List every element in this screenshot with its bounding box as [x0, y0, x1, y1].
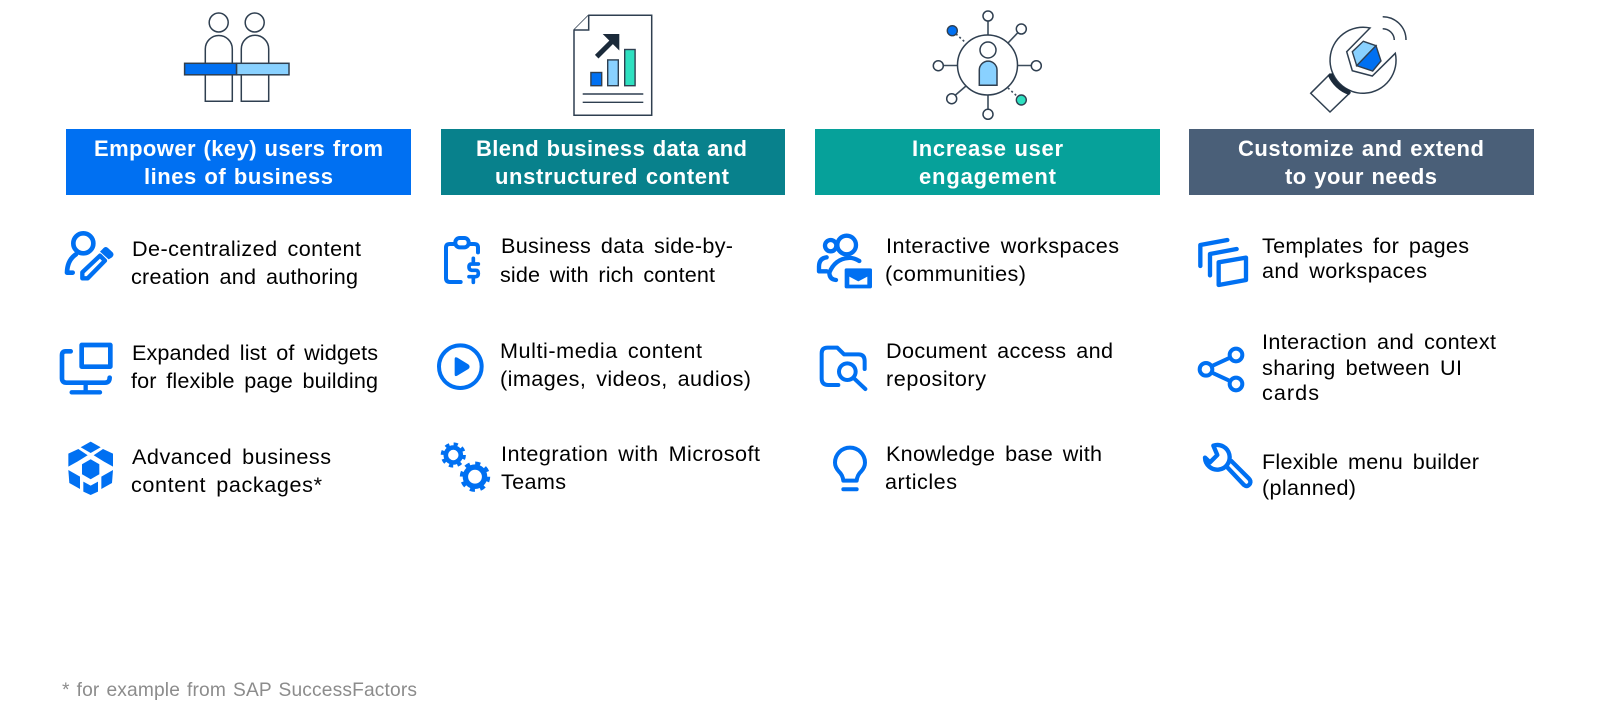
- panel: empower users header: [66, 129, 411, 195]
- panel: user engagement header: Increase user: [912, 136, 1063, 161]
- icon: stacked templates: [1200, 240, 1246, 285]
- icon: wrench with hex nut and signal: [1311, 17, 1406, 112]
- icon: share nodes: [1200, 349, 1242, 390]
- text: flexible menu builder: Flexible menu builder: [1262, 449, 1479, 474]
- panel: blend data header: [441, 129, 785, 195]
- icon: user with pencil: [67, 233, 114, 278]
- text: advanced business content: content packages*: [131, 472, 323, 497]
- text: expanded list of widgets: for flexible page building: [131, 368, 378, 393]
- text: multi-media content: [500, 338, 751, 391]
- panel: customize header: to your needs: [1285, 164, 1437, 189]
- text: advanced business content: [131, 444, 331, 497]
- icon: document with rising bar chart: [574, 15, 652, 115]
- text: multi-media content: (images, videos, audios): [500, 366, 751, 391]
- text: expanded list of widgets: Expanded list of widgets: [132, 340, 378, 365]
- text: flexible menu builder: (planned): [1262, 475, 1356, 500]
- icon: clipboard with dollar: [446, 238, 478, 282]
- icon: person in a network hub: [933, 11, 1041, 119]
- panel: customize header: Customize and extend: [1238, 136, 1484, 161]
- text: knowledge base with articles: articles: [885, 469, 957, 494]
- text: multi-media content: Multi-media content: [500, 338, 702, 363]
- text: interactive workspaces: Interactive workspaces: [886, 233, 1119, 258]
- panel: user engagement header: engagement: [919, 164, 1057, 189]
- panel: empower users header: lines of business: [144, 164, 333, 189]
- text: integration with Microsoft Teams: [501, 441, 760, 494]
- text: flexible menu builder: [1262, 449, 1479, 500]
- text: knowledge base with articles: Knowledge base with: [886, 441, 1102, 466]
- text: integration with Microsoft Teams: Integration with Microsoft: [501, 441, 760, 466]
- text: advanced business content: Advanced business: [132, 444, 331, 469]
- text: expanded list of widgets: [131, 340, 378, 393]
- text: templates for pages: [1262, 233, 1469, 283]
- text: business data side-by-side: [500, 233, 733, 287]
- text: interaction and context sharing: cards: [1262, 380, 1319, 405]
- text: de-centralized content: creation and authoring: [131, 264, 358, 289]
- text: de-centralized content: De-centralized content: [132, 236, 361, 261]
- text: interactive workspaces: [885, 233, 1119, 286]
- panel: customize header: [1189, 129, 1534, 195]
- text: de-centralized content: [131, 236, 361, 289]
- text: interaction and context sharing: Interaction and context: [1262, 329, 1496, 354]
- text: templates for pages: Templates for pages: [1262, 233, 1469, 258]
- icon: light bulb: [835, 448, 865, 489]
- text: interactive workspaces: (communities): [885, 261, 1026, 286]
- text: business data side-by-side: Business data side-by-: [501, 233, 733, 258]
- icon: monitor: [62, 345, 110, 392]
- text: document access and repository: repository: [886, 366, 986, 391]
- text: knowledge base with articles: [885, 441, 1102, 494]
- icon: two people joined by a bar: [185, 13, 289, 101]
- icon: cube package: [68, 442, 113, 495]
- icon: folder with magnifier: [822, 348, 865, 389]
- panel: empower users header: Empower (key) users from: [94, 136, 383, 161]
- text: interaction and context sharing: [1262, 329, 1496, 405]
- text: interaction and context sharing: sharing between UI: [1262, 355, 1462, 380]
- icon: wrench: [1205, 445, 1250, 486]
- text: business data side-by-side: side with rich content: [500, 262, 715, 287]
- text: document access and repository: Document access and: [886, 338, 1113, 363]
- text: document access and repository: [886, 338, 1113, 391]
- panel: user engagement header: [815, 129, 1160, 195]
- text: templates for pages: and workspaces: [1262, 258, 1427, 283]
- icon: gears: [442, 444, 489, 490]
- panel: blend data header: unstructured content: [495, 164, 730, 189]
- icon: community with envelope: [819, 236, 872, 288]
- panel: blend data header: Blend business data and: [476, 136, 747, 161]
- icon: play button: [439, 345, 482, 388]
- footnote: * for example from SAP SuccessFactors: [62, 680, 417, 701]
- text: integration with Microsoft Teams: Teams: [501, 469, 566, 494]
